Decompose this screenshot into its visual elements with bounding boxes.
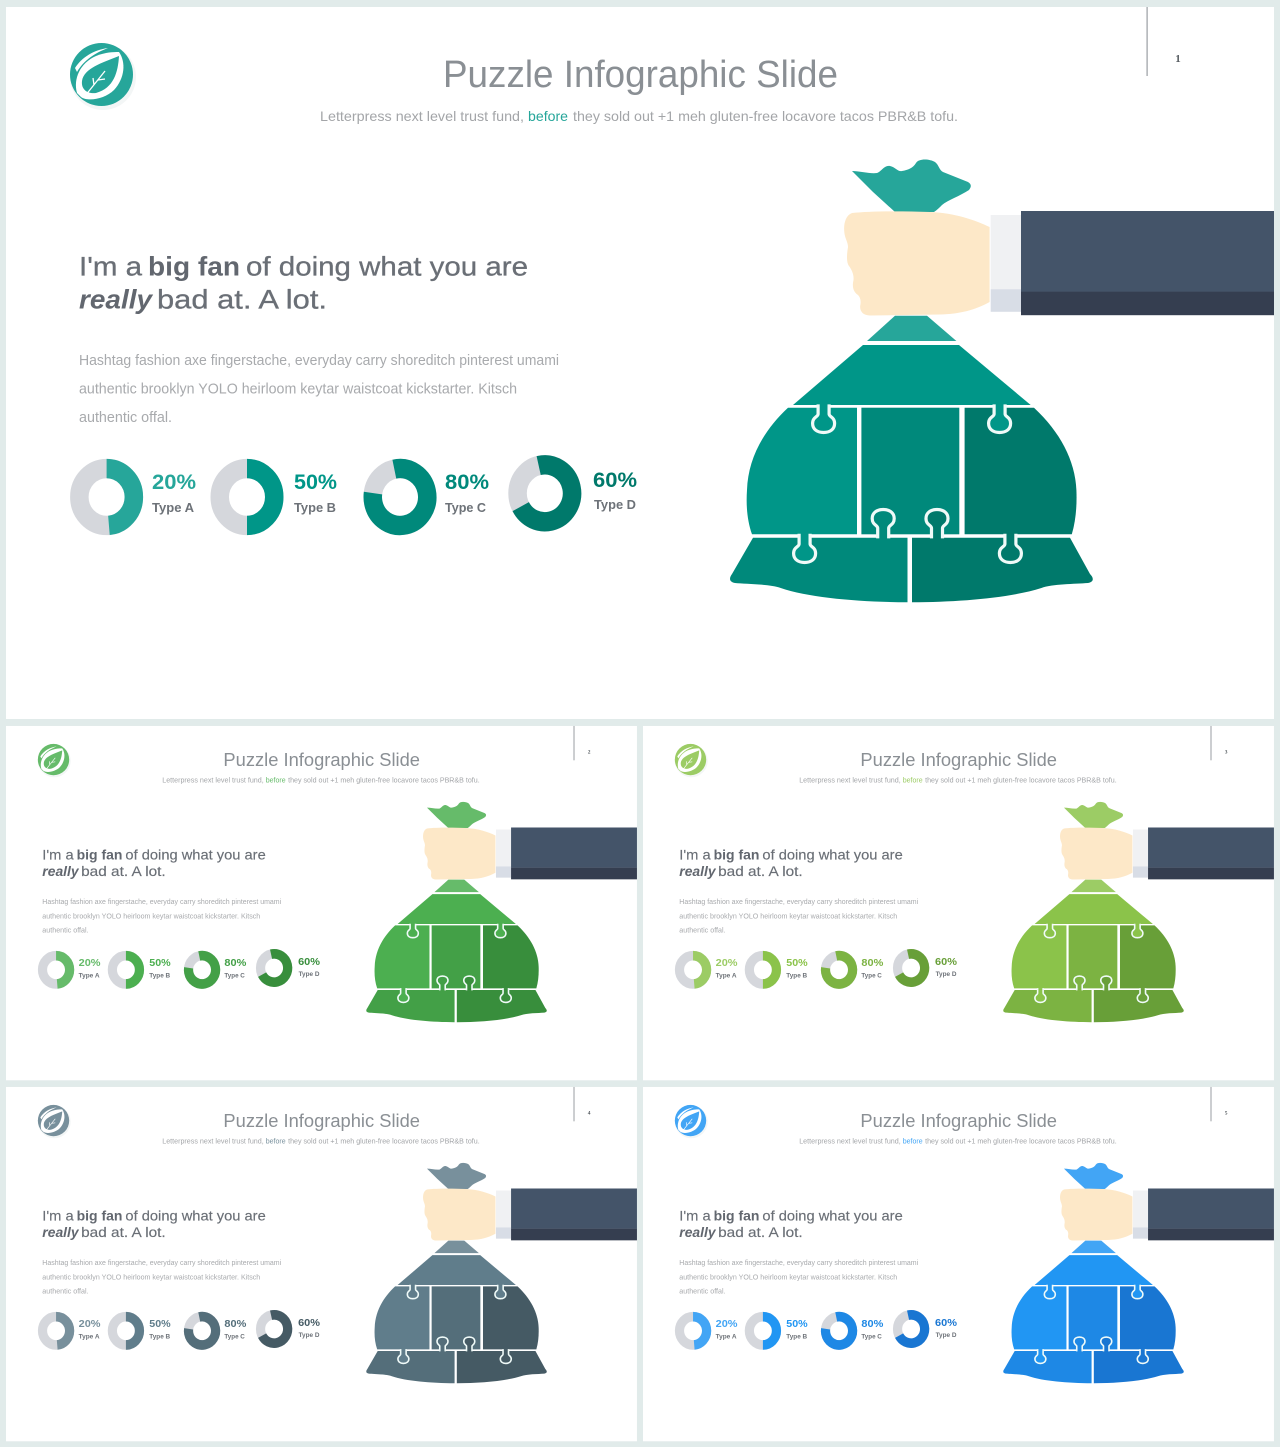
page number bbox=[574, 1087, 591, 1121]
donut: type A: 20% bbox=[716, 1319, 738, 1330]
heading bbox=[42, 1209, 266, 1240]
donut: type D bbox=[895, 951, 957, 985]
body text: authentic brooklyn YOLO heirloom keytar waistcoat kickstarter. Kitsch bbox=[79, 382, 517, 398]
puzzle piece: bottom left bbox=[730, 538, 908, 602]
heading: really bbox=[42, 1225, 80, 1240]
donut: type D: 60% bbox=[593, 469, 637, 492]
heading: bad at. A lot. bbox=[81, 864, 166, 879]
donut: type B bbox=[749, 956, 808, 984]
donut: type C: 80% bbox=[861, 1319, 883, 1330]
subtitle: Letterpress next level trust fund, bbox=[799, 778, 901, 785]
donut: type C bbox=[186, 953, 246, 987]
subtitle: they sold out +1 meh gluten-free locavore tacos PBR&B tofu. bbox=[288, 1139, 480, 1146]
body text: Hashtag fashion axe fingerstache, everyday carry shoreditch pinterest umami bbox=[42, 897, 282, 906]
heading: really bbox=[679, 864, 717, 879]
title: Puzzle Infographic Slide bbox=[860, 750, 1057, 771]
heading: of doing what you are bbox=[125, 1209, 266, 1224]
donut: type A: Type A bbox=[716, 1333, 737, 1340]
body text bbox=[679, 1258, 919, 1295]
subtitle bbox=[799, 1139, 1117, 1146]
donut: type B: 50% bbox=[294, 471, 337, 494]
page number bbox=[1146, 7, 1181, 76]
heading: I'm a bbox=[42, 848, 74, 863]
puzzle piece: middle right bbox=[965, 408, 1077, 534]
heading: bad at. A lot. bbox=[718, 864, 803, 879]
donut: type B: 50% bbox=[786, 1319, 808, 1330]
subtitle: Letterpress next level trust fund, bbox=[162, 778, 264, 785]
body text bbox=[79, 353, 559, 426]
heading: big fan bbox=[714, 848, 759, 863]
heading: I'm a bbox=[679, 848, 711, 863]
panel: slide 4 (blue grey) bbox=[6, 1087, 637, 1441]
subtitle: before bbox=[266, 1139, 286, 1146]
page number bbox=[1210, 726, 1228, 760]
donut: type D: Type D bbox=[936, 971, 957, 978]
subtitle: before bbox=[903, 778, 923, 785]
donut: type C: 80% bbox=[861, 958, 883, 969]
subtitle bbox=[162, 778, 480, 785]
subtitle: before bbox=[903, 1139, 923, 1146]
donut: type D: Type D bbox=[594, 497, 636, 512]
illustration: hand holding puzzle bag bbox=[366, 802, 637, 1022]
donut: type C: Type C bbox=[224, 972, 245, 979]
donut: type C: 80% bbox=[445, 471, 489, 494]
donut: type A bbox=[79, 469, 196, 525]
heading: bad at. A lot. bbox=[157, 284, 327, 314]
donut: type D: 60% bbox=[935, 1318, 957, 1329]
heading: big fan bbox=[77, 1209, 122, 1224]
donut: type A: Type A bbox=[716, 972, 737, 979]
donut: type C: 80% bbox=[224, 1319, 246, 1330]
body text: Hashtag fashion axe fingerstache, everyday carry shoreditch pinterest umami bbox=[79, 353, 559, 369]
donut: type B bbox=[112, 956, 171, 984]
heading: bad at. A lot. bbox=[718, 1225, 803, 1240]
body text: authentic offal. bbox=[42, 1286, 89, 1295]
subtitle bbox=[162, 1139, 480, 1146]
heading: really bbox=[679, 1225, 717, 1240]
title: Puzzle Infographic Slide bbox=[443, 54, 838, 96]
heading: big fan bbox=[77, 848, 122, 863]
heading: really bbox=[79, 284, 154, 314]
panel: slide 3 (light green) bbox=[643, 726, 1274, 1080]
donut: type A: 20% bbox=[152, 471, 196, 494]
donut: type A: Type A bbox=[152, 500, 195, 515]
subtitle: Letterpress next level trust fund, bbox=[320, 108, 524, 124]
heading: I'm a bbox=[42, 1209, 74, 1224]
body text: authentic offal. bbox=[679, 925, 726, 934]
body text: Hashtag fashion axe fingerstache, everyday carry shoreditch pinterest umami bbox=[679, 1258, 919, 1267]
icon: leaf logo bbox=[38, 744, 71, 777]
icon: bag knot bbox=[852, 160, 971, 212]
subtitle: before bbox=[528, 108, 568, 124]
heading: of doing what you are bbox=[246, 252, 528, 282]
page number: 4 bbox=[588, 1110, 591, 1116]
donut: type C bbox=[186, 1314, 246, 1348]
donut: type D: Type D bbox=[936, 1332, 957, 1339]
subtitle: before bbox=[266, 778, 286, 785]
page number: 2 bbox=[588, 749, 591, 755]
body text: authentic offal. bbox=[79, 410, 172, 426]
heading: I'm a bbox=[79, 252, 143, 282]
heading: of doing what you are bbox=[125, 848, 266, 863]
page number: 3 bbox=[1225, 749, 1228, 755]
body text: Hashtag fashion axe fingerstache, everyday carry shoreditch pinterest umami bbox=[42, 1258, 282, 1267]
heading: I'm a bbox=[679, 1209, 711, 1224]
subtitle: Letterpress next level trust fund, bbox=[799, 1139, 901, 1146]
donut: type B: Type B bbox=[149, 1333, 171, 1340]
subtitle: they sold out +1 meh gluten-free locavore tacos PBR&B tofu. bbox=[573, 108, 958, 124]
page number: 5 bbox=[1225, 1110, 1228, 1116]
donut: type C: Type C bbox=[861, 1333, 882, 1340]
body text: authentic brooklyn YOLO heirloom keytar waistcoat kickstarter. Kitsch bbox=[679, 1272, 897, 1281]
illustration: hand holding puzzle bag bbox=[1003, 802, 1274, 1022]
body text bbox=[42, 1258, 282, 1295]
page number bbox=[1210, 1087, 1228, 1121]
panel: main slide (teal) bbox=[6, 7, 1274, 719]
donut: type B: 50% bbox=[149, 958, 171, 969]
puzzle piece: bottom right bbox=[912, 538, 1093, 602]
body text: authentic brooklyn YOLO heirloom keytar waistcoat kickstarter. Kitsch bbox=[42, 911, 260, 920]
donut: type C: Type C bbox=[861, 972, 882, 979]
heading bbox=[42, 848, 266, 879]
body text: authentic brooklyn YOLO heirloom keytar waistcoat kickstarter. Kitsch bbox=[42, 1272, 260, 1281]
body text: authentic offal. bbox=[42, 925, 89, 934]
subtitle: Letterpress next level trust fund, bbox=[162, 1139, 264, 1146]
donut: type B: Type B bbox=[786, 972, 808, 979]
panel: slide 2 (green) bbox=[6, 726, 637, 1080]
donut: type C: Type C bbox=[445, 500, 487, 515]
page number bbox=[574, 726, 591, 760]
heading: big fan bbox=[148, 252, 240, 282]
donut: type B: Type B bbox=[294, 500, 336, 515]
title: Puzzle Infographic Slide bbox=[223, 1111, 420, 1132]
heading: really bbox=[42, 864, 80, 879]
subtitle: they sold out +1 meh gluten-free locavore tacos PBR&B tofu. bbox=[925, 1139, 1117, 1146]
donut: type D: Type D bbox=[299, 1332, 320, 1339]
body text: Hashtag fashion axe fingerstache, everyday carry shoreditch pinterest umami bbox=[679, 897, 919, 906]
donut: type A: Type A bbox=[79, 1333, 100, 1340]
heading: big fan bbox=[714, 1209, 759, 1224]
donut: type A bbox=[679, 1317, 738, 1345]
donut: type C bbox=[368, 463, 489, 531]
illustration: hand holding puzzle bag bbox=[730, 160, 1274, 602]
icon: leaf logo bbox=[70, 43, 136, 110]
donut: type B bbox=[749, 1317, 808, 1345]
icon: leaf logo bbox=[675, 744, 708, 777]
heading: bad at. A lot. bbox=[81, 1225, 166, 1240]
donut: type B: 50% bbox=[149, 1319, 171, 1330]
donut: type C bbox=[823, 953, 883, 987]
puzzle piece: middle centre bbox=[861, 408, 959, 534]
title: Puzzle Infographic Slide bbox=[223, 750, 420, 771]
donut: type D bbox=[258, 1312, 320, 1346]
panel: slide 5 (blue) bbox=[643, 1087, 1274, 1441]
donut: type A bbox=[679, 956, 738, 984]
subtitle bbox=[320, 108, 958, 124]
donut: type B: Type B bbox=[786, 1333, 808, 1340]
donut: type B: 50% bbox=[786, 958, 808, 969]
body text: authentic offal. bbox=[679, 1286, 726, 1295]
heading bbox=[679, 1209, 903, 1240]
donut: type D bbox=[258, 951, 320, 985]
donut: type B bbox=[112, 1317, 171, 1345]
donut: type A bbox=[42, 956, 101, 984]
body text bbox=[42, 897, 282, 934]
icon: shirt cuff bbox=[991, 215, 1021, 312]
donut: type D bbox=[512, 459, 637, 527]
subtitle: they sold out +1 meh gluten-free locavore tacos PBR&B tofu. bbox=[288, 778, 480, 785]
donut: type D: 60% bbox=[298, 957, 320, 968]
donut: type D bbox=[895, 1312, 957, 1346]
icon: jacket sleeve bbox=[1021, 211, 1274, 315]
heading bbox=[79, 252, 528, 314]
donut: type D: Type D bbox=[299, 971, 320, 978]
body text bbox=[679, 897, 919, 934]
puzzle piece: upper bag bbox=[793, 345, 1031, 405]
donut: type C: 80% bbox=[224, 958, 246, 969]
donut: type C: Type C bbox=[224, 1333, 245, 1340]
puzzle piece: middle left bbox=[747, 408, 857, 534]
icon: leaf logo bbox=[38, 1105, 71, 1138]
heading: of doing what you are bbox=[762, 848, 903, 863]
puzzle tabs bbox=[794, 404, 1021, 562]
heading: of doing what you are bbox=[762, 1209, 903, 1224]
donut: type B bbox=[220, 469, 337, 525]
donut: type A bbox=[42, 1317, 101, 1345]
donut: type A: 20% bbox=[716, 958, 738, 969]
donut: type C bbox=[823, 1314, 883, 1348]
illustration: hand holding puzzle bag bbox=[1003, 1163, 1274, 1383]
title: Puzzle Infographic Slide bbox=[860, 1111, 1057, 1132]
subtitle bbox=[799, 778, 1117, 785]
icon: hand bbox=[844, 211, 990, 316]
donut: type A: Type A bbox=[79, 972, 100, 979]
donut: type D: 60% bbox=[298, 1318, 320, 1329]
body text: authentic brooklyn YOLO heirloom keytar waistcoat kickstarter. Kitsch bbox=[679, 911, 897, 920]
icon: leaf logo bbox=[675, 1105, 708, 1138]
donut: type A: 20% bbox=[79, 958, 101, 969]
heading bbox=[679, 848, 903, 879]
donut: type D: 60% bbox=[935, 957, 957, 968]
page number: 1 bbox=[1175, 53, 1181, 65]
puzzle piece: neck bbox=[867, 316, 956, 341]
illustration: hand holding puzzle bag bbox=[366, 1163, 637, 1383]
donut: type A: 20% bbox=[79, 1319, 101, 1330]
subtitle: they sold out +1 meh gluten-free locavore tacos PBR&B tofu. bbox=[925, 778, 1117, 785]
donut: type B: Type B bbox=[149, 972, 171, 979]
